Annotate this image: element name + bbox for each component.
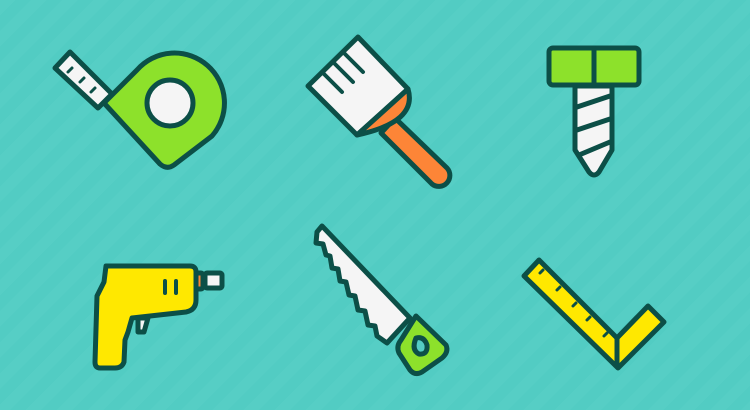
icon: tape measure	[55, 52, 224, 167]
icon: carpenter square	[524, 260, 664, 368]
icon: drill	[95, 266, 222, 368]
icon: screw	[549, 48, 639, 175]
icon: paintbrush	[308, 37, 450, 186]
icon: hand saw	[316, 226, 447, 374]
